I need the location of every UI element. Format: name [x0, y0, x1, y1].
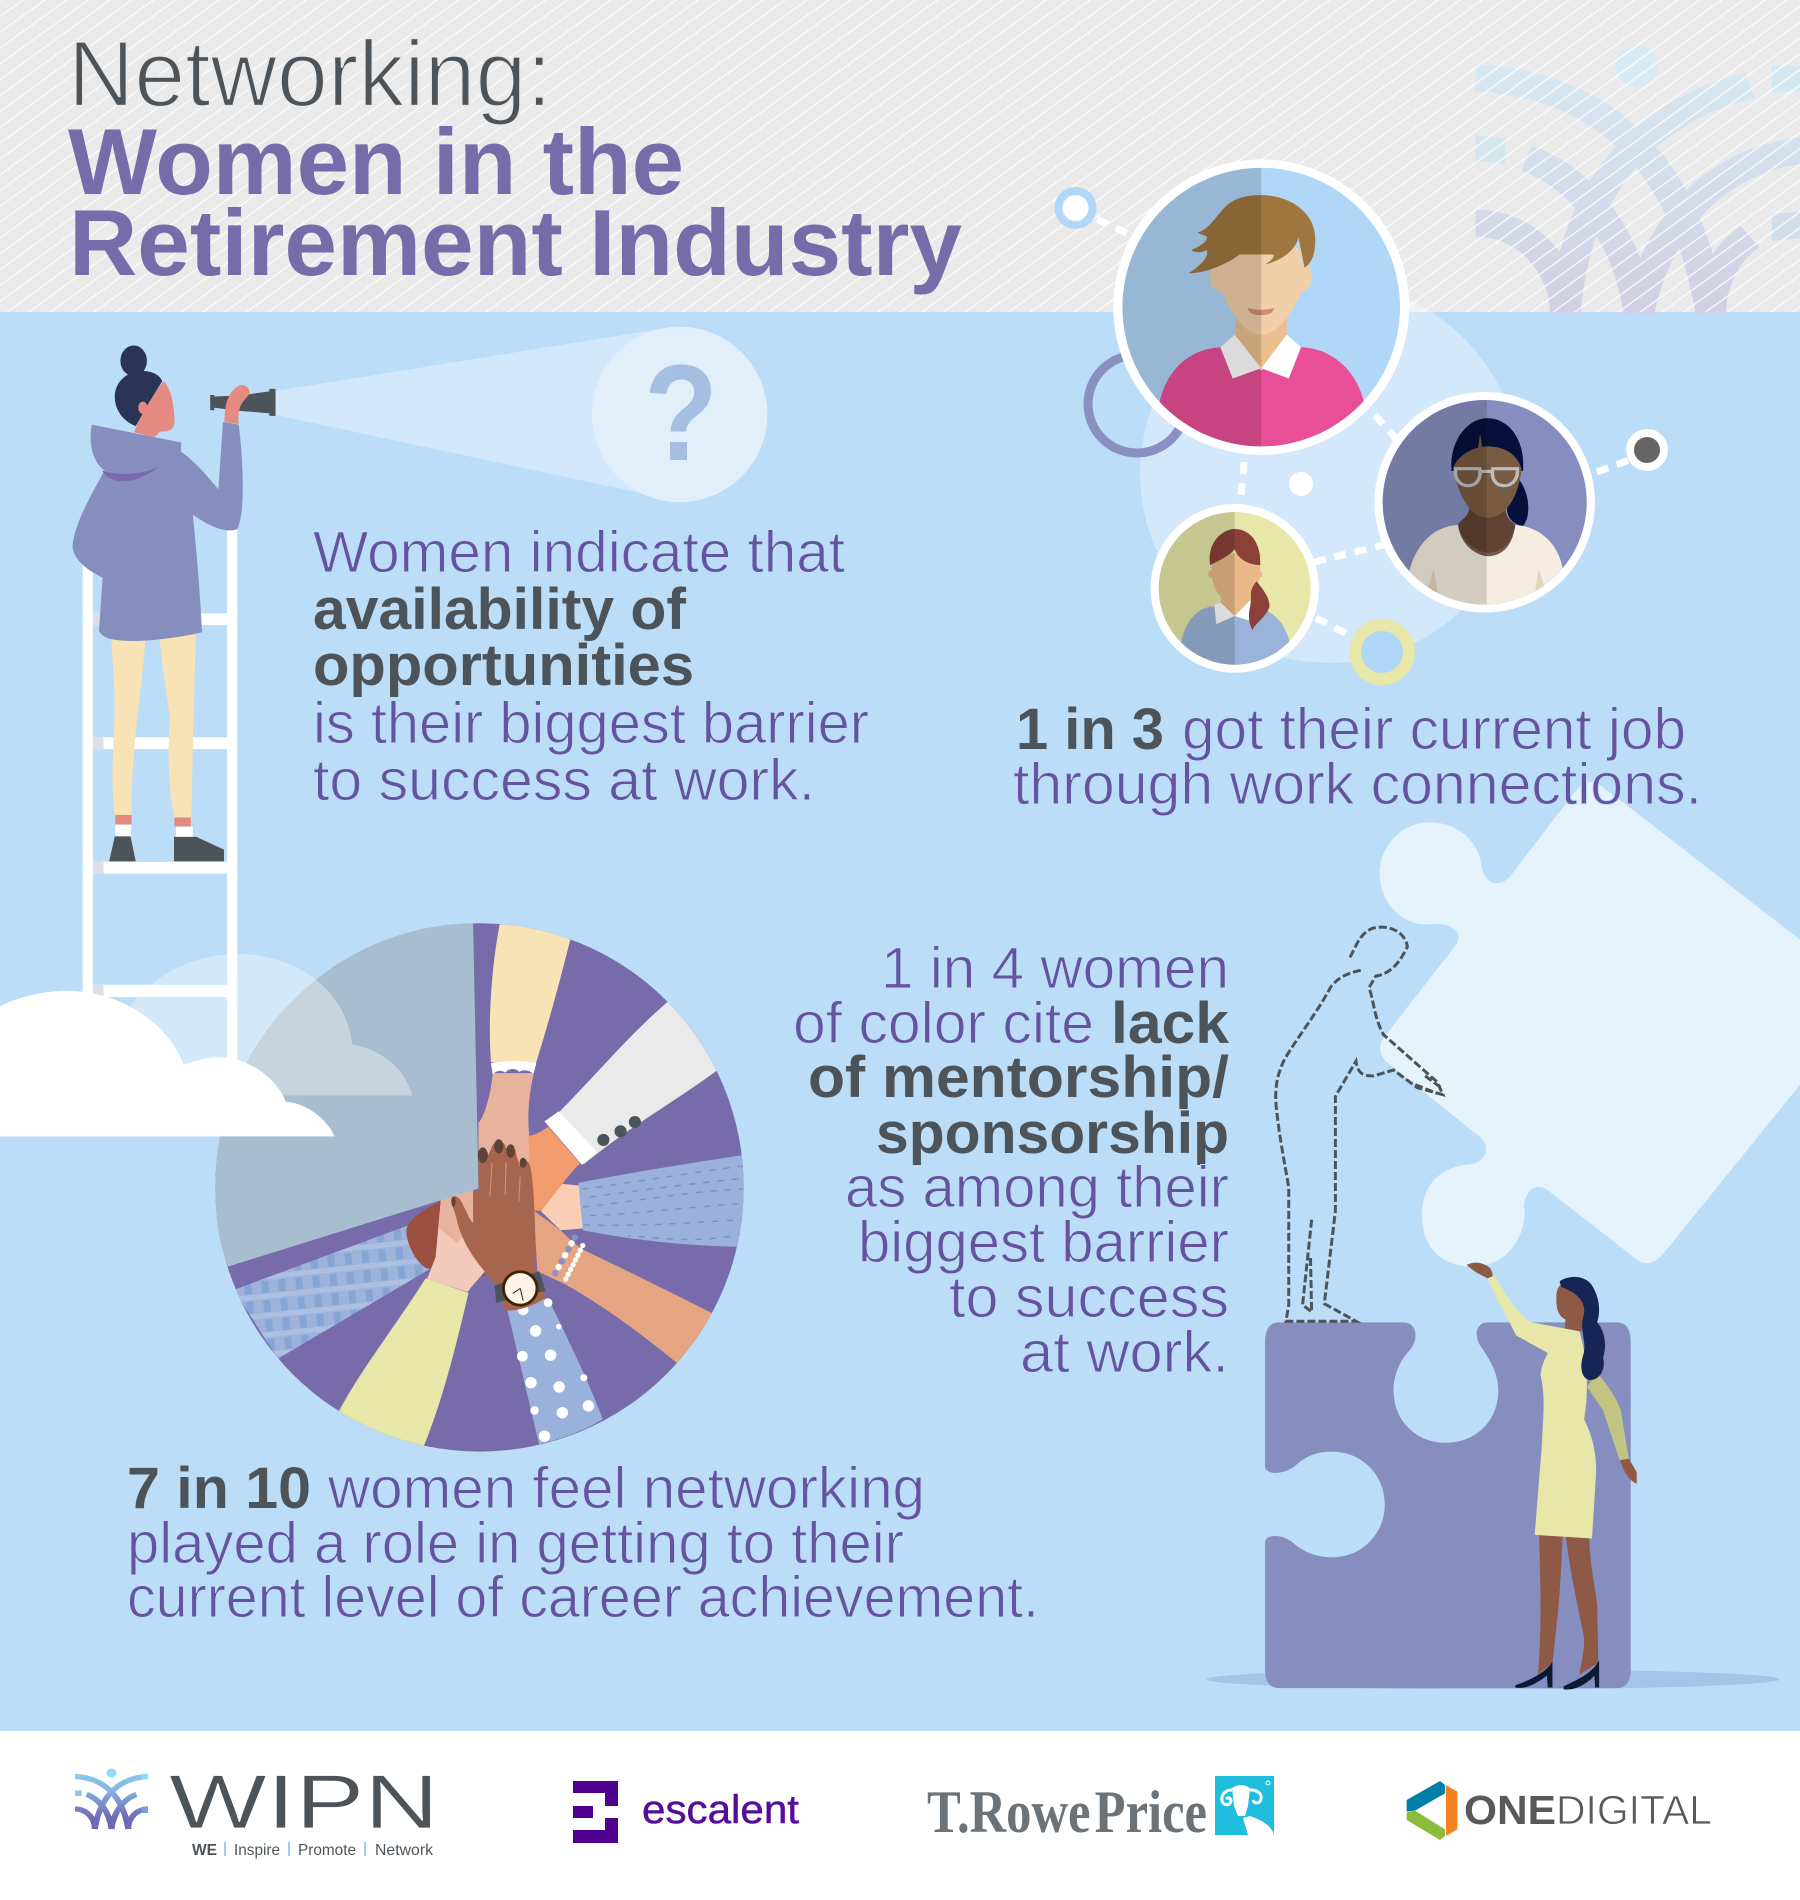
- logo: WIPN: WIPN: [169, 1760, 439, 1845]
- logo: WIPN: [75, 1760, 439, 1859]
- text: availability of opportunities: to success at work.: [313, 748, 815, 813]
- text: 1 in 4 women of color: 1 in 4 women: [881, 936, 1229, 1001]
- text: 7 in 10: 7 in 10: [127, 1456, 311, 1521]
- avatar: woman with ponytail: [1151, 504, 1319, 674]
- text: availability of opportunities: is their biggest barrier: [313, 691, 869, 756]
- pale cloud: [122, 954, 412, 1096]
- text: availability of opportunities: Women indicate that: [313, 520, 845, 585]
- connection rings and dashes: [1058, 191, 1664, 679]
- top brown hand with watch: [451, 1139, 546, 1310]
- arm: knit sleeve and hand: [541, 1154, 750, 1247]
- woman with telescope: [72, 346, 276, 861]
- text: 1 in 4 women of color: to success: [949, 1265, 1229, 1330]
- logo: T. Rowe Price: T.Rowe Price: [927, 1779, 1207, 1845]
- title: Women in the: [68, 109, 684, 214]
- hands in a circle illustration: [215, 918, 750, 1452]
- text: 1 in 4 women of color: biggest barrier: [858, 1210, 1229, 1275]
- logo: OneDigital: [1407, 1781, 1712, 1840]
- arm: yellow sleeve and hand: [337, 1189, 491, 1448]
- arm: white sleeve and hand: [528, 1002, 736, 1211]
- logo: escalent: [573, 1781, 799, 1843]
- arm: polka dot sleeve: [507, 1298, 603, 1444]
- title: Networking:: [68, 21, 552, 126]
- arm: rust sleeve: [406, 1200, 486, 1277]
- title: Retirement Industry: [69, 190, 962, 295]
- text: 1 in 3: 1 in 3: [1016, 697, 1164, 762]
- avatar: woman in pink top: [1113, 160, 1409, 455]
- logo: WIPN: Network: [375, 1842, 434, 1859]
- text: availability of opportunities: opportunities: [313, 633, 694, 698]
- text: 1 in 3: through work connections.: [1013, 752, 1702, 817]
- ground shadow and base puzzle piece: [1206, 1322, 1780, 1689]
- spotlight beam: [273, 327, 767, 502]
- text: 1 in 4 women of color: at work.: [1020, 1320, 1229, 1385]
- text: 1 in 4 women of color: sponsorship: [876, 1101, 1229, 1166]
- text: availability of opportunities: [313, 520, 869, 813]
- dashed outline figure: [1276, 927, 1443, 1321]
- text: 1 in 4 women of color: as among their: [845, 1155, 1229, 1220]
- text: 1 in 4 women of color: of color cite: [793, 991, 1094, 1056]
- woman reaching for puzzle piece: [1467, 1263, 1637, 1690]
- text: 1 in 3: got their current job: [1182, 697, 1686, 762]
- ladder: [83, 524, 237, 1065]
- puzzle scene: floating piece: [1380, 782, 1800, 1267]
- arm: plaid sleeve: [234, 1223, 432, 1359]
- logo: WIPN: Inspire: [234, 1842, 280, 1859]
- text: 7 in 10: [127, 1456, 1039, 1630]
- white cloud: [0, 991, 335, 1136]
- blanked grey-blue wedge: [215, 923, 478, 1267]
- text: 7 in 10: played a role in getting to their: [127, 1511, 904, 1576]
- arm: lower right with bracelets: [534, 1211, 714, 1364]
- logo: WIPN: WE: [192, 1842, 217, 1859]
- logo: OneDigital: ONE: [1464, 1787, 1556, 1833]
- logo: WIPN: Promote: [298, 1842, 356, 1859]
- arm: cream sleeve and hand: [478, 918, 571, 1207]
- text: 1 in 4 women of color: lack: [1111, 991, 1230, 1056]
- network background bubble: [1140, 283, 1520, 663]
- text: 1 in 4 women of color: [793, 936, 1230, 1385]
- text: availability of opportunities: availability of: [313, 577, 687, 642]
- logo: escalent: escalent: [642, 1788, 799, 1832]
- header band with stripes and watermark: [0, 0, 1800, 312]
- text: 7 in 10: women feel networking: [327, 1456, 925, 1521]
- logo: OneDigital: DIGITAL: [1556, 1787, 1712, 1833]
- text: 1 in 3: [1013, 697, 1702, 817]
- question mark: ?: [644, 337, 718, 490]
- text: 1 in 4 women of color: of mentorship/: [808, 1045, 1229, 1110]
- text: 7 in 10: current level of career achievement.: [127, 1565, 1039, 1630]
- avatar: woman with glasses: [1374, 392, 1595, 625]
- title: [68, 21, 962, 295]
